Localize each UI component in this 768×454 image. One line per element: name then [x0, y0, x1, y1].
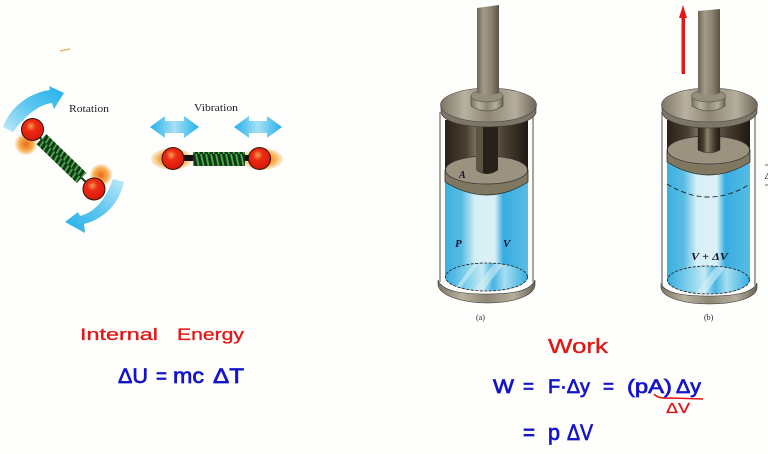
equation: work: (pA) — [627, 377, 672, 398]
piston shaft — [698, 122, 720, 153]
stray orange mark — [60, 49, 70, 51]
piston — [445, 170, 528, 195]
cylinder a — [438, 5, 536, 322]
rod — [477, 5, 499, 95]
atom: upper — [22, 118, 44, 140]
label: rotation: Rotation — [69, 104, 110, 115]
equation: p delta V: p — [548, 420, 560, 445]
collar — [471, 96, 503, 111]
arrow: lower rotation — [65, 179, 124, 233]
top cap — [662, 107, 757, 128]
top cap — [441, 107, 536, 127]
equation: work: F·Δy — [548, 377, 591, 398]
annotation: delta V underbrace — [654, 394, 703, 417]
spring — [27, 125, 100, 196]
rod — [698, 9, 720, 95]
caption: b: (b) — [704, 313, 714, 322]
equation: internal energy: = — [156, 365, 167, 388]
initial piston line — [667, 184, 750, 197]
motion blur: left atom — [151, 148, 193, 170]
equation: internal energy: ΔU — [118, 365, 148, 388]
gas volume — [667, 155, 750, 294]
equation: p delta V: ΔV — [567, 420, 593, 445]
equation: work: = — [523, 377, 534, 398]
cylinder floor — [445, 262, 528, 292]
gas volume — [445, 175, 528, 291]
label: P: P — [455, 238, 462, 250]
label: V: V — [503, 238, 512, 250]
cylinder walls — [662, 112, 755, 285]
motion blur: lower atom — [90, 164, 112, 186]
motion blur: right atom — [241, 148, 283, 170]
cylinder floor — [667, 266, 750, 294]
arrow: piston force — [679, 5, 687, 74]
atom: right — [248, 148, 270, 170]
cylinder base — [438, 280, 535, 303]
collar — [692, 96, 725, 111]
piston shaft — [476, 118, 498, 174]
annotation: delta V underbrace: ΔV — [666, 400, 690, 417]
equation: internal energy — [118, 365, 244, 388]
cylinder base — [661, 283, 757, 304]
spring — [183, 152, 249, 166]
upper chamber — [445, 120, 528, 172]
caption: a: (a) — [476, 313, 485, 322]
heading: internal energy — [80, 325, 245, 344]
piston — [667, 150, 750, 175]
heading: internal energy: Energy — [177, 325, 245, 344]
equation: internal energy: ΔT — [213, 365, 244, 388]
arrow: left double — [150, 116, 199, 138]
upper chamber — [667, 120, 750, 152]
motion blur: upper atom — [15, 133, 37, 155]
heading: work: Work — [548, 336, 609, 358]
atom: lower — [83, 178, 105, 200]
atom: left — [162, 148, 184, 170]
arrow: right double — [234, 116, 282, 138]
cylinder b — [661, 9, 768, 322]
cylinder walls — [440, 112, 533, 282]
equation: p delta V — [523, 420, 593, 445]
vibration diagram — [150, 103, 283, 170]
arrow: upper rotation — [3, 86, 64, 132]
label: A: A — [458, 170, 466, 181]
label: V + delta V: V + ΔV — [691, 251, 730, 263]
label: vibration: Vibration — [194, 103, 239, 114]
rotation diagram — [3, 86, 124, 233]
equation: work: W — [493, 377, 514, 398]
heading: internal energy: Internal — [80, 325, 158, 344]
delta y marker — [764, 165, 768, 185]
equation: work: Δy — [676, 377, 702, 398]
equation: p delta V: = — [523, 420, 535, 445]
equation: work: = — [603, 377, 614, 398]
equation: work — [493, 377, 702, 398]
equation: internal energy: mc — [173, 365, 204, 388]
